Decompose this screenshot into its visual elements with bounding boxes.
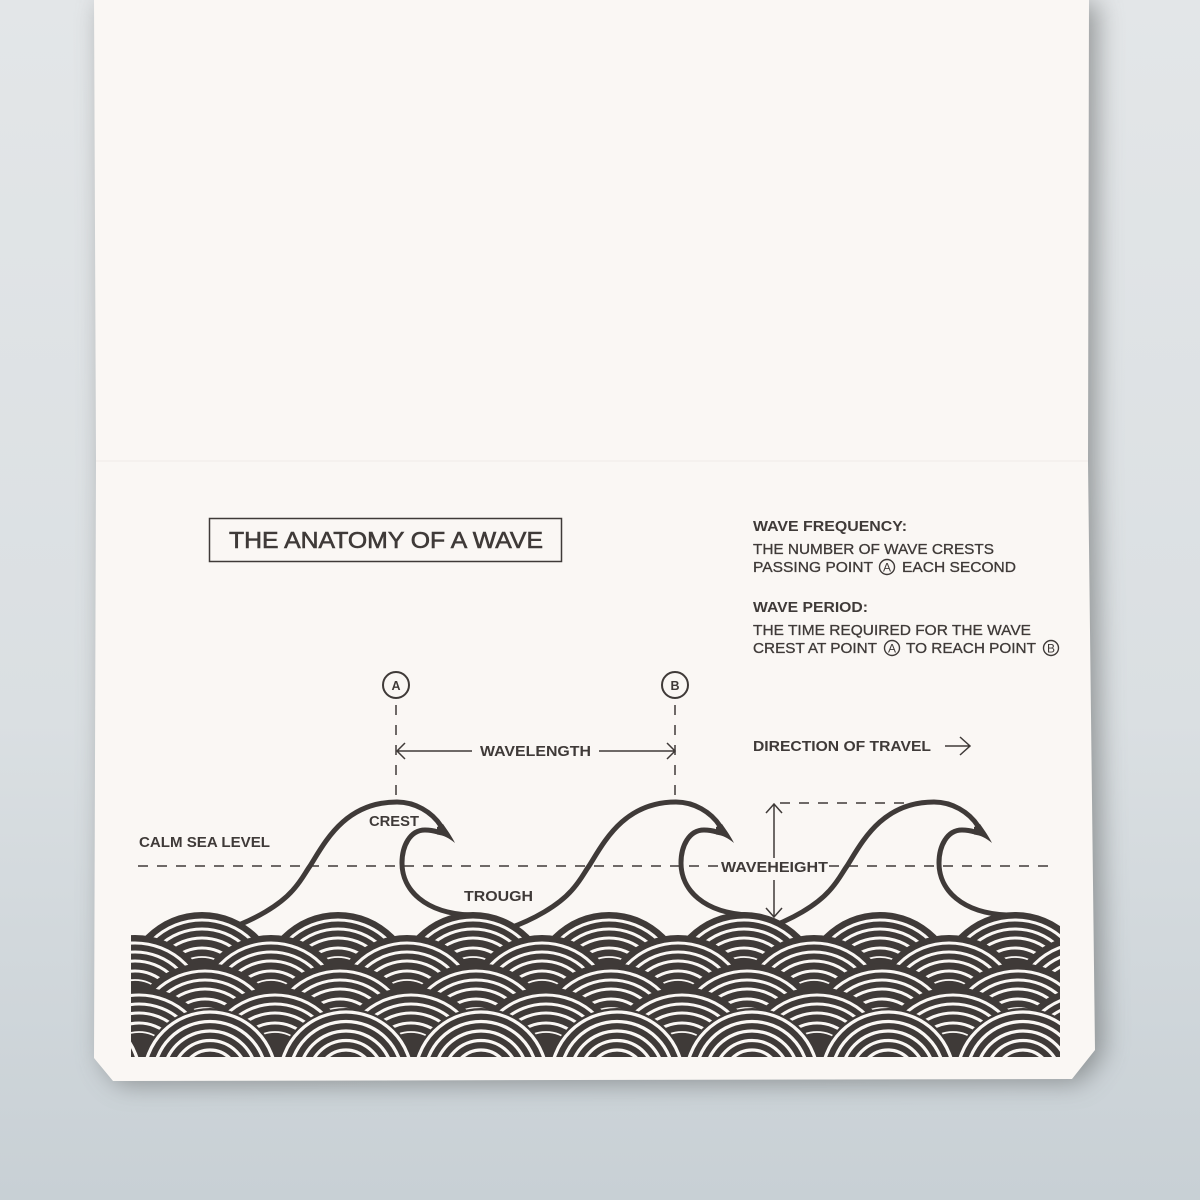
text block: wave frequency: PASSING POINT — [753, 559, 873, 576]
wave 1 — [225, 802, 470, 930]
text block: wave period — [753, 600, 1058, 657]
text block: wave frequency: THE NUMBER OF WAVE CRESTS — [753, 541, 994, 558]
wavelength measure: WAVELENGTH — [480, 744, 591, 760]
point B marker — [662, 672, 688, 797]
text block: wave period: B — [1047, 642, 1055, 656]
calm sea level dashed line — [138, 865, 1050, 867]
text block: wave frequency: A — [883, 560, 891, 574]
text block: wave period: WAVE PERIOD: — [753, 600, 868, 616]
paper shadow — [102, 3, 1103, 1084]
title — [210, 518, 562, 562]
wave height measure — [721, 803, 905, 917]
wave 2 — [504, 802, 749, 930]
text block: wave period: THE TIME REQUIRED FOR THE WAVE — [753, 622, 1031, 639]
panel: open notebook page — [94, 0, 1095, 1081]
text block: wave frequency: WAVE FREQUENCY: — [753, 519, 907, 535]
wave 3 — [762, 802, 1007, 930]
label: crest: CREST — [369, 814, 419, 830]
wave height measure: WAVEHEIGHT — [721, 860, 828, 876]
title: THE ANATOMY OF A WAVE — [229, 527, 543, 553]
seigaiha sea pattern — [131, 912, 1060, 1057]
label: calm sea level: CALM SEA LEVEL — [139, 835, 270, 851]
direction of travel label and arrow: DIRECTION OF TRAVEL — [753, 739, 931, 755]
text block: wave period: A — [888, 642, 896, 656]
direction of travel label and arrow — [753, 737, 970, 755]
point B marker: B — [670, 679, 680, 693]
point A marker: A — [391, 679, 401, 693]
wavelength measure — [397, 743, 675, 760]
text block: wave period: TO REACH POINT — [906, 640, 1036, 657]
label: trough: TROUGH — [464, 889, 533, 905]
text block: wave frequency — [753, 519, 1016, 576]
point A marker — [383, 672, 409, 797]
text block: wave frequency: EACH SECOND — [902, 559, 1016, 576]
text block: wave period: CREST AT POINT — [753, 640, 877, 657]
